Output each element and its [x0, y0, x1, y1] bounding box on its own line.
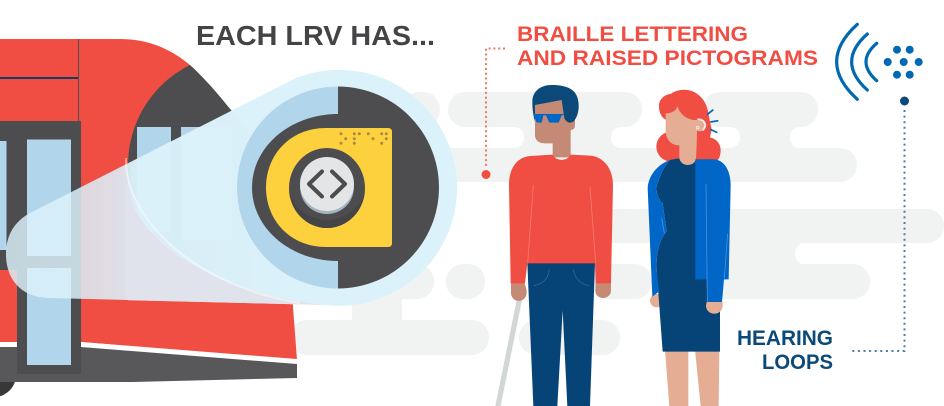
white stripe [0, 342, 297, 363]
neck and face [535, 100, 575, 157]
hands [511, 283, 611, 301]
windscreen [128, 65, 310, 299]
lens reflection arc [126, 158, 300, 303]
door frame [0, 121, 81, 374]
left hand [650, 294, 663, 307]
windscreen windows [137, 127, 232, 240]
red dotted leader [482, 48, 505, 179]
jeans [527, 263, 595, 406]
dress [656, 158, 720, 352]
sweater arm lines [528, 185, 596, 263]
hair [656, 90, 721, 163]
hair [532, 85, 579, 123]
ear [695, 121, 705, 131]
legs [665, 350, 719, 406]
wheel [0, 353, 16, 397]
heading: braille lettering and raised pictograms: BRAILLE LETTERING [517, 23, 748, 46]
blue dotted leader [849, 96, 909, 351]
braille dots [340, 132, 388, 145]
background clouds [280, 92, 944, 355]
blue half disc [237, 86, 338, 288]
person: man with cane [495, 85, 613, 406]
chevrons icon [309, 172, 345, 196]
hearing aid [696, 120, 705, 130]
jean pockets [533, 269, 589, 286]
dark plate backing [252, 114, 345, 261]
magnifier lens [6, 70, 457, 306]
face and neck [666, 106, 697, 165]
right hand [706, 302, 723, 314]
roof seam lines [0, 39, 79, 121]
sunglasses [534, 114, 563, 123]
heading: each LRV has: EACH LRV HAS... [196, 20, 435, 51]
button [289, 148, 365, 228]
lens lower tint [128, 190, 325, 305]
sweater [509, 155, 613, 283]
label: hearing loops: HEARING [737, 327, 833, 350]
train body [0, 39, 297, 360]
cane [495, 300, 522, 406]
jacket [648, 159, 731, 302]
sound ticks [707, 110, 718, 133]
icon: hearing loop waves [837, 24, 923, 99]
skirt [0, 347, 297, 382]
yellow plate [266, 128, 392, 247]
dark half disc [338, 86, 439, 288]
label: hearing loops: LOOPS [762, 351, 833, 374]
jacket lines [662, 184, 728, 302]
door windows [0, 140, 71, 365]
person: woman with hearing aid [648, 90, 731, 406]
heading: braille lettering and raised pictograms: AND RAISED PICTOGRAMS [517, 47, 818, 70]
train [0, 39, 310, 397]
